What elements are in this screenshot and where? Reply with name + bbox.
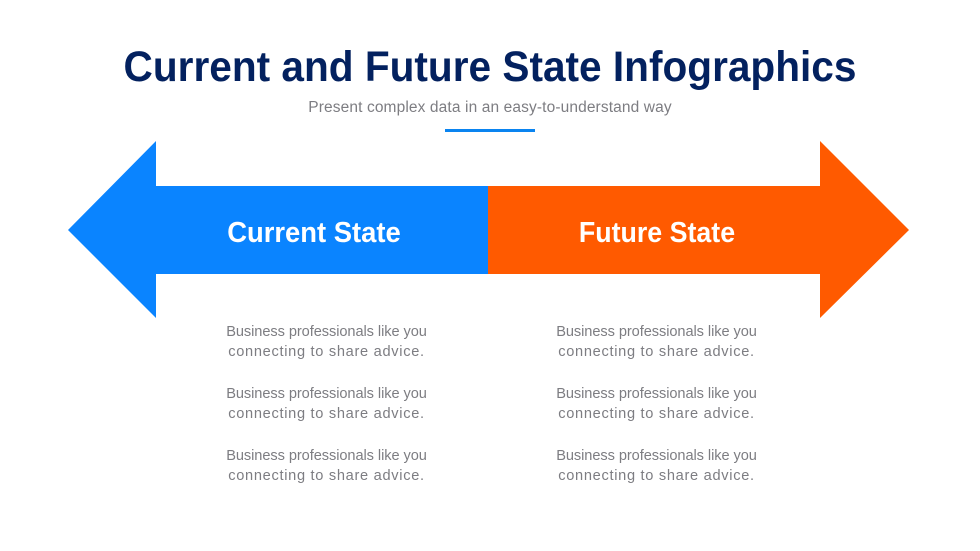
current state text 3: connecting to share advice. (228, 468, 425, 484)
future state text 1 (556, 324, 757, 360)
current state text 3 (226, 448, 427, 484)
accent underline (445, 129, 535, 132)
subtitle: Present complex data in an easy-to-understand way (308, 99, 672, 116)
left arrow: current state (68, 141, 488, 318)
future state text 1: connecting to share advice. (558, 344, 755, 360)
future state text 2: Business professionals like you (556, 386, 757, 402)
current state text 2 (226, 386, 427, 422)
future state text 1: Business professionals like you (556, 324, 757, 340)
current state text 2: Business professionals like you (226, 386, 427, 402)
right arrow: future state (488, 141, 909, 318)
current state text 1: connecting to share advice. (228, 344, 425, 360)
future state text 3 (556, 448, 757, 484)
heading: future state: Future State (578, 217, 735, 249)
title: Current and Future State Infographics (124, 44, 856, 91)
future state text 3: connecting to share advice. (558, 468, 755, 484)
current state text 1 (226, 324, 427, 360)
heading: current state: Current State (227, 217, 401, 249)
future state text 2 (556, 386, 757, 422)
future state text 2: connecting to share advice. (558, 406, 755, 422)
current state text 2: connecting to share advice. (228, 406, 425, 422)
current state text 1: Business professionals like you (226, 324, 427, 340)
future state text 3: Business professionals like you (556, 448, 757, 464)
current state text 3: Business professionals like you (226, 448, 427, 464)
